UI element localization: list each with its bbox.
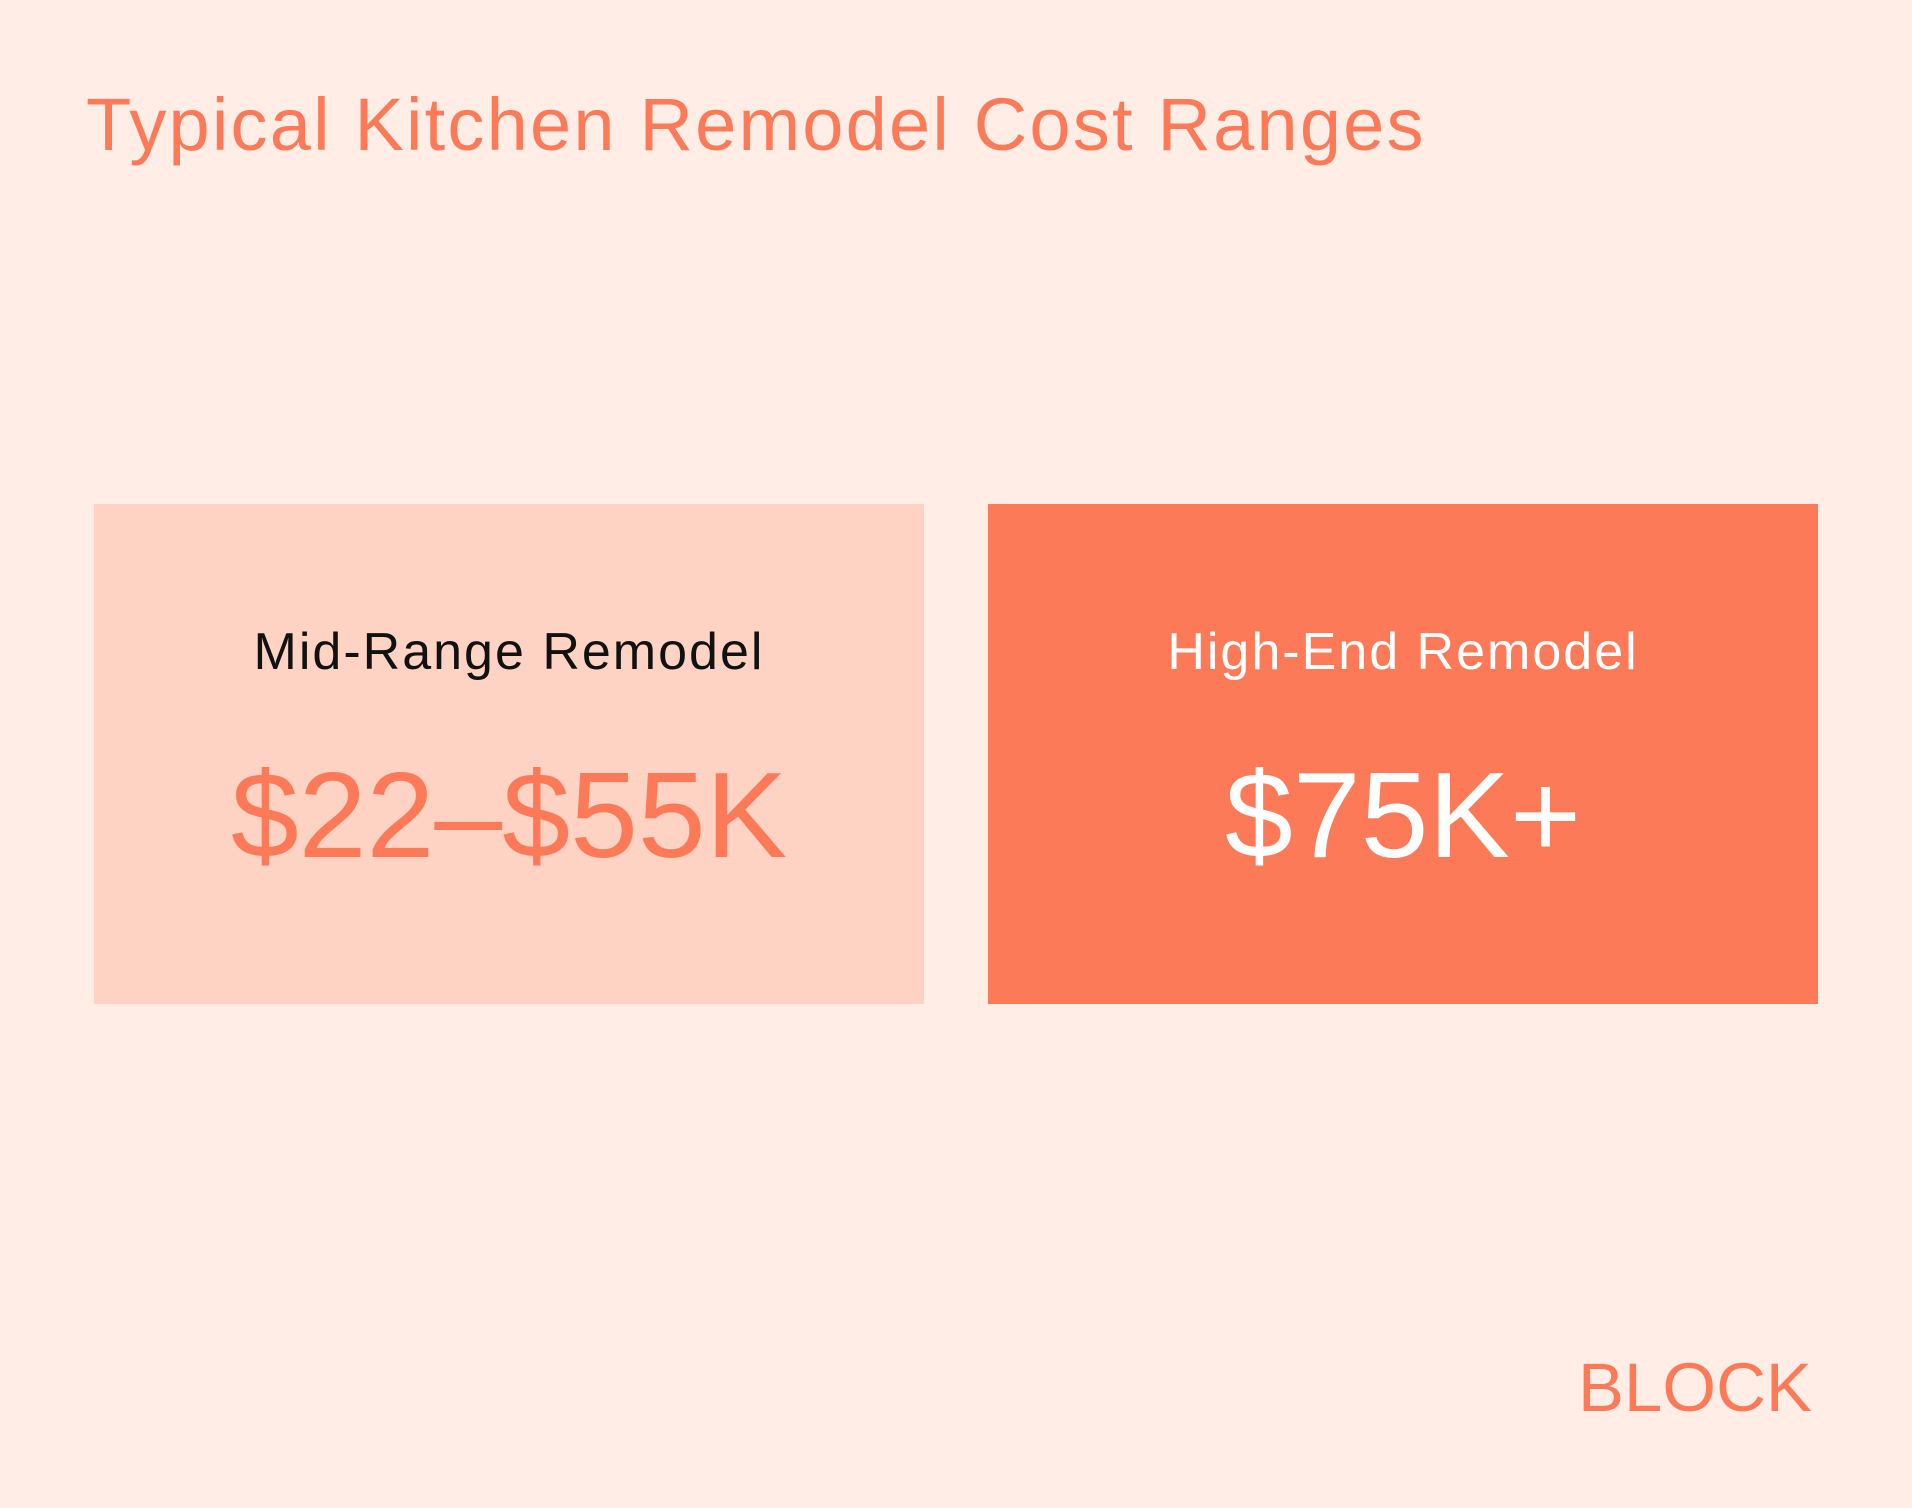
value: high-end: $75K+ [1225,747,1581,883]
logo: BLOCK [1578,1349,1812,1426]
label: high-end: High-End Remodel [1167,623,1639,681]
panel: high-end [988,504,1818,1004]
title: Typical Kitchen Remodel Cost Ranges [86,83,1426,166]
panel: mid-range [94,504,924,1004]
value: mid-range: $22–$55K [231,747,787,883]
label: mid-range: Mid-Range Remodel [254,623,764,681]
